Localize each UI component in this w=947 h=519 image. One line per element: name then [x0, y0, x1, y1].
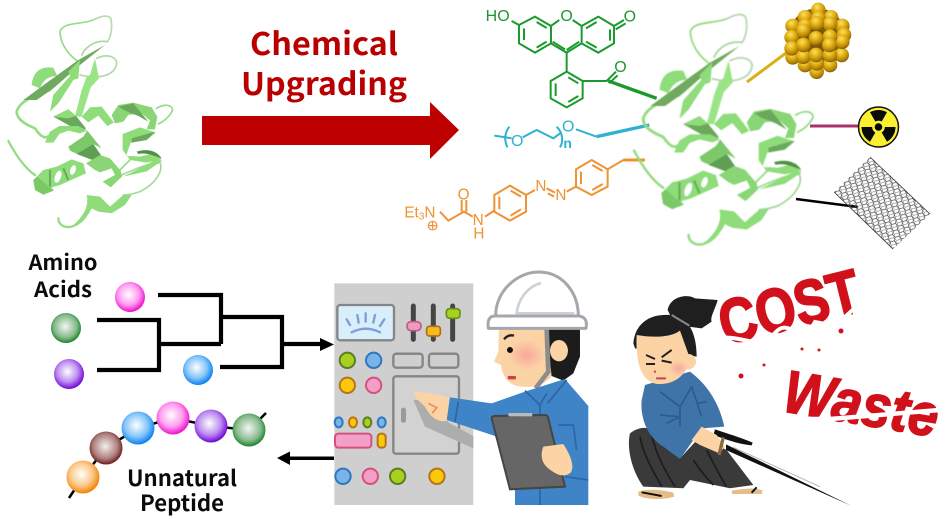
- label: Unnatural Peptide: Peptide: [140, 486, 224, 518]
- chemical structure: azobenzene linker: O: [458, 186, 470, 203]
- chemical structure: azobenzene linker: Et: [404, 204, 419, 221]
- chemical structure: PEG chain: [494, 118, 649, 151]
- label: Unnatural Peptide: Unnatural: [127, 461, 237, 493]
- control panel: [334, 283, 473, 505]
- peptide chain: [66, 402, 266, 498]
- worker with helmet: [413, 272, 588, 505]
- protein: upgraded structure: [634, 15, 813, 245]
- title: Chemical Upgrading: Chemical: [250, 19, 398, 64]
- chemical structure: azobenzene linker: N: [473, 212, 484, 229]
- chemical structure: fluorescein: O: [624, 8, 636, 25]
- label: Amino Acids: [27, 247, 98, 304]
- arrow: output from panel: [277, 452, 334, 465]
- chemical structure: azobenzene linker: 3: [419, 211, 425, 222]
- icon: radiation symbol: [858, 107, 898, 147]
- icon: carbon nanotube: [834, 157, 930, 249]
- samurai with sword: [629, 296, 852, 506]
- chemical structure: fluorescein: O: [614, 59, 627, 76]
- arrow: upgrading direction: [202, 102, 459, 159]
- chemical structure: azobenzene linker: N: [535, 178, 546, 195]
- title: Chemical Upgrading: Upgrading: [241, 59, 407, 104]
- chemical structure: azobenzene linker: N: [555, 187, 566, 204]
- chemical structure: PEG chain: O: [562, 118, 574, 135]
- label: Amino Acids: Acids: [33, 274, 92, 304]
- chemical structure: azobenzene linker: N: [424, 204, 435, 221]
- chemical structure: PEG chain: O: [511, 133, 523, 150]
- icon: gold nanoparticle: [784, 3, 851, 79]
- stamp: COST slashed: [712, 257, 870, 378]
- linker: radioisotope: [810, 124, 858, 128]
- amino acid: purple: [54, 359, 84, 389]
- chemical structure: azobenzene linker: H: [473, 226, 484, 243]
- amino acid: magenta: [115, 282, 145, 312]
- protein: native structure: [8, 16, 173, 227]
- label: Amino Acids: Amino: [27, 247, 98, 277]
- linker: gold: [747, 53, 786, 82]
- chemical structure: PEG chain: n: [563, 135, 572, 151]
- chemical structure: azobenzene linker: [404, 160, 645, 243]
- label: Unnatural Peptide: [127, 461, 237, 518]
- chemical structure: fluorescein: HO: [486, 8, 510, 25]
- title: Chemical Upgrading: [241, 19, 407, 104]
- flow diagram: peptide coupling tree: [97, 295, 334, 370]
- amino acid: green: [51, 313, 81, 343]
- amino acid: blue: [183, 355, 213, 385]
- chemical structure: fluorescein: O: [560, 8, 573, 25]
- chemical structure: fluorescein: [486, 8, 657, 107]
- linker: nanotube: [796, 199, 858, 207]
- stamp: COST slashed: COST: [712, 257, 867, 359]
